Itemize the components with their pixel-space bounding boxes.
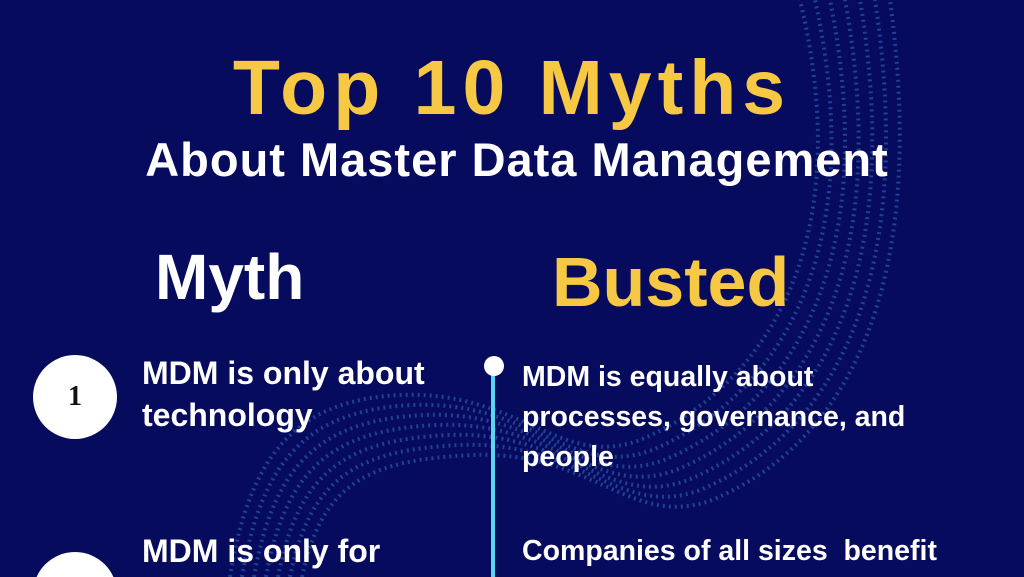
myth 1 text: technology: [142, 397, 313, 433]
number circle 1: [33, 355, 117, 439]
busted 1 text: processes, governance, and: [522, 401, 905, 433]
busted 1 text: people: [522, 441, 614, 473]
subtitle: About Master Data Management: [145, 133, 889, 186]
timeline line: [491, 366, 495, 577]
myth 1 text: [142, 355, 425, 433]
busted 1 text: MDM is equally about: [522, 361, 813, 393]
myth 2 text: MDM is only for: [142, 533, 380, 569]
busted 2 text: Companies of all sizes benefit: [522, 535, 937, 567]
title: Top 10 Myths: [233, 45, 791, 131]
myth 1 text: MDM is only about: [142, 355, 425, 391]
number circle 2: [36, 552, 114, 577]
heading: Busted: Busted: [552, 243, 789, 321]
heading: Myth: Myth: [155, 241, 304, 313]
busted 1 text: [522, 361, 905, 473]
number circle 1: 1: [68, 381, 82, 412]
timeline dot: [484, 356, 504, 376]
